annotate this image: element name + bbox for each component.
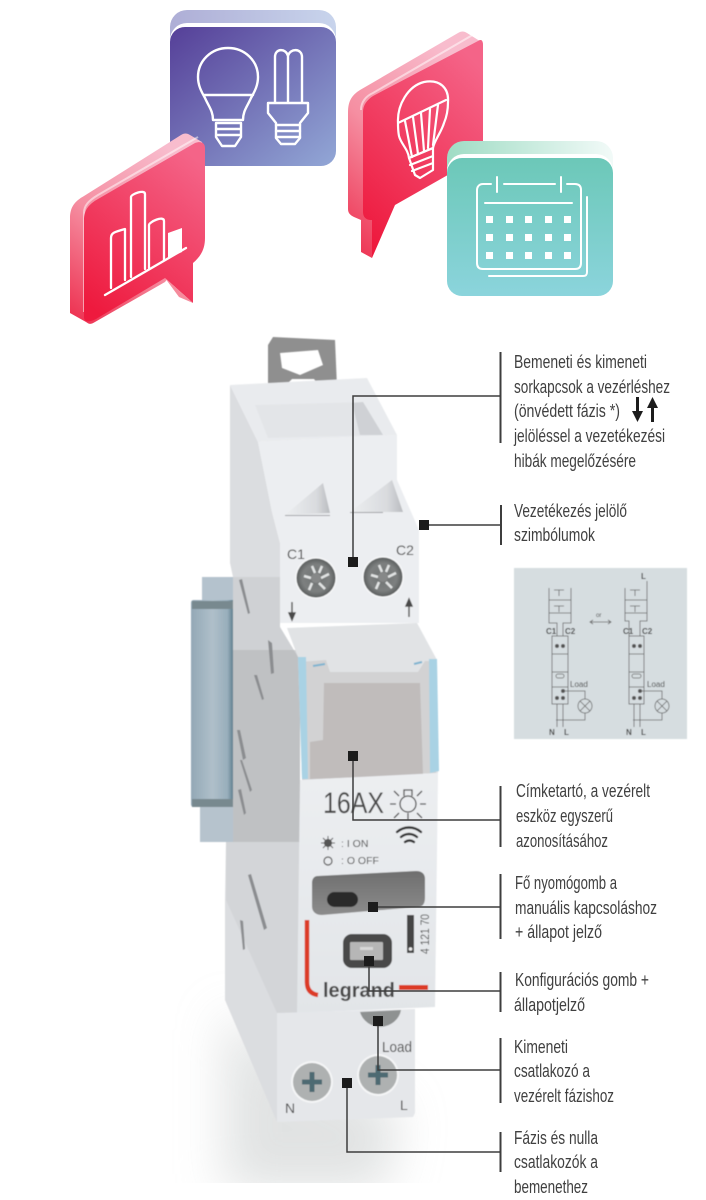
diagram labels: L <box>641 572 646 581</box>
diagram labels: N <box>549 728 555 737</box>
wiring diagram <box>514 568 687 739</box>
screw N <box>291 1061 333 1103</box>
callout text: main push button: Fő nyomógomb a <box>515 873 618 893</box>
barcode mark <box>407 915 414 953</box>
callout text: control terminals: Bemeneti és kimeneti <box>514 352 647 372</box>
callout text: main push button: manuális kapcsoláshoz <box>515 898 657 918</box>
callout text: output terminal: vezérelt fázishoz <box>514 1086 614 1106</box>
diagram labels: N <box>626 728 632 737</box>
DIN rail <box>191 577 234 842</box>
callout text: control terminals <box>513 352 670 471</box>
callout text: main push button <box>515 873 657 942</box>
diagram labels: C1 <box>546 627 557 636</box>
callout text: phase and neutral: csatlakozók a <box>514 1152 599 1172</box>
callout lines and markers <box>347 352 501 1172</box>
icon: chart speech bubble <box>70 134 205 324</box>
callout text: control terminals: hibák megelőzésére <box>514 451 636 471</box>
on legend: : I ON <box>341 838 368 850</box>
callout text: wiring symbols: szimbólumok <box>514 525 596 545</box>
callout text: label holder: azonosításához <box>516 831 608 851</box>
front panel <box>297 773 438 1013</box>
icon: lamps tile <box>170 10 336 166</box>
label Load: Load <box>382 1039 412 1056</box>
diagram labels: C1 <box>623 627 634 636</box>
diagram labels: Load <box>570 680 588 689</box>
product photo: modular switch <box>191 337 439 1122</box>
upper terminal face <box>280 532 419 623</box>
config button <box>343 934 392 968</box>
off legend <box>324 855 379 867</box>
callout text: control terminals: (önvédett fázis *) <box>514 401 620 421</box>
diagram labels <box>546 572 665 737</box>
body side <box>225 385 300 1122</box>
callout text: wiring symbols <box>514 501 627 545</box>
icon: calendar tile <box>447 141 613 296</box>
callout text: phase and neutral: Fázis és nulla <box>514 1128 599 1148</box>
clip hook <box>268 337 337 387</box>
icon: down and up arrows <box>632 397 658 422</box>
load screw <box>360 1010 401 1027</box>
red corner mark <box>307 920 318 995</box>
arrow down <box>289 602 295 620</box>
callout text: configuration button <box>514 970 649 1015</box>
lamp glyph <box>390 790 426 820</box>
wifi glyph <box>397 828 421 842</box>
red bar <box>399 985 428 990</box>
right schematic lines <box>625 581 669 727</box>
label C1: C1 <box>287 546 305 562</box>
callout text: main push button: + állapot jelző <box>515 922 602 942</box>
body top <box>258 435 419 623</box>
screw L <box>357 1054 399 1096</box>
callout text: label holder <box>516 781 650 851</box>
callout text: wiring symbols: Vezetékezés jelölő <box>514 501 627 521</box>
label C2: C2 <box>396 542 414 558</box>
label holder <box>287 623 439 780</box>
diagram labels: Load <box>647 680 665 689</box>
callout text: label holder: Címketartó, a vezérelt <box>516 781 650 801</box>
label L: L <box>400 1097 408 1113</box>
legrand logo: legrand <box>323 980 395 1002</box>
diagram labels: L <box>641 728 646 737</box>
diagram labels: L <box>564 728 569 737</box>
on legend <box>321 836 368 850</box>
callout text: output terminal: Kimeneti <box>514 1037 568 1057</box>
callout text: configuration button: Konfigurációs gomb + <box>515 970 649 990</box>
diagram labels: C2 <box>642 627 653 636</box>
diagram labels: or <box>596 613 601 619</box>
screw C2 <box>362 556 404 598</box>
callout text: configuration button: állapotjelző <box>514 995 585 1015</box>
lower terminal block <box>277 1009 415 1122</box>
arrow up <box>406 599 412 617</box>
callout text: label holder: eszköz egyszerű <box>516 806 613 826</box>
callout text: phase and neutral: bemenethez <box>514 1177 588 1197</box>
main push button <box>312 871 425 915</box>
article number: 4 121 70 <box>420 914 432 954</box>
diagram labels: C2 <box>565 627 576 636</box>
label N: N <box>285 1100 295 1116</box>
left schematic lines <box>549 588 592 727</box>
rating: 16AX <box>323 787 384 820</box>
screw C1 <box>295 557 337 599</box>
marker squares <box>342 520 429 1088</box>
icon: LED bulb speech bubble <box>348 32 483 258</box>
shadow under device <box>225 1010 400 1190</box>
callout text: phase and neutral <box>514 1128 599 1197</box>
callout text: output terminal: csatlakozó a <box>514 1061 591 1081</box>
callout text: output terminal <box>514 1037 614 1106</box>
off legend: : O OFF <box>341 855 379 867</box>
